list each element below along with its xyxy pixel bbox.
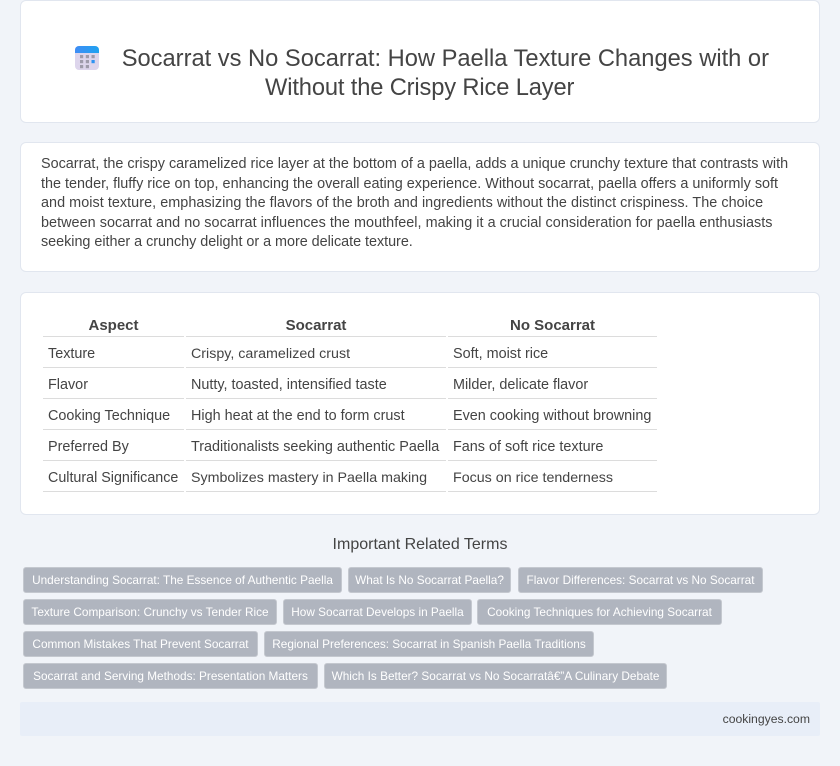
comparison table: Aspect <box>88 317 139 334</box>
comparison table: High heat at the end to form crust <box>191 408 405 424</box>
comparison table: Socarrat <box>286 317 346 334</box>
comparison table: Texture <box>48 346 95 362</box>
title <box>122 46 769 101</box>
panel: comparison table <box>20 292 820 515</box>
related term tags: Understanding Socarrat: The Essence of Authentic Paella <box>32 573 333 587</box>
comparison table: Preferred By <box>48 439 129 455</box>
related term tags: Flavor Differences: Socarrat vs No Socarrat <box>527 573 754 587</box>
comparison table: Focus on rice tenderness <box>453 470 613 486</box>
comparison table: Even cooking without browning <box>453 408 651 424</box>
title: Without the Crispy Rice Layer <box>265 75 574 101</box>
comparison table: Cultural Significance <box>48 470 178 486</box>
footer bar <box>20 702 820 736</box>
comparison table: Nutty, toasted, intensified taste <box>191 377 387 393</box>
comparison table: Crispy, caramelized crust <box>191 346 350 362</box>
comparison table: Flavor <box>48 377 88 393</box>
related term tags: Cooking Techniques for Achieving Socarrat <box>487 605 712 619</box>
icon: calendar <box>75 46 99 70</box>
related term tags: Regional Preferences: Socarrat in Spanish Paella Traditions <box>272 637 586 651</box>
intro paragraph: and moist texture, emphasizing the flavors of the broth and ingredients without the distinct crispiness. The choice <box>41 195 763 211</box>
footer source: cookingyes.com <box>723 712 810 726</box>
comparison table: Traditionalists seeking authentic Paella <box>191 439 439 455</box>
related term tags: Common Mistakes That Prevent Socarrat <box>32 637 249 651</box>
intro paragraph: the tender, fluffy rice on top, enhancing the overall eating experience. Without socarrat, paella offers a uniformly soft <box>41 176 778 192</box>
title: Socarrat vs No Socarrat: How Paella Texture Changes with or <box>122 46 769 72</box>
related term tags: How Socarrat Develops in Paella <box>291 605 464 619</box>
heading: related terms: Important Related Terms <box>333 536 507 553</box>
comparison table: Cooking Technique <box>48 408 170 424</box>
related term tags <box>23 567 763 689</box>
comparison table: Milder, delicate flavor <box>453 377 588 393</box>
related term tags: Which Is Better? Socarrat vs No Socarratâ€”A Culinary Debate <box>332 669 659 683</box>
intro paragraph <box>41 156 788 250</box>
intro paragraph: seeking either a crunchy delight or a more delicate texture. <box>41 234 413 250</box>
intro paragraph: Socarrat, the crispy caramelized rice layer at the bottom of a paella, adds a unique crunchy texture that contrasts with <box>41 156 788 172</box>
comparison table <box>43 317 657 492</box>
related term tags: Texture Comparison: Crunchy vs Tender Rice <box>31 605 269 619</box>
comparison table: Fans of soft rice texture <box>453 439 603 455</box>
related term tags: Socarrat and Serving Methods: Presentation Matters <box>33 669 308 683</box>
comparison table: Symbolizes mastery in Paella making <box>191 470 427 486</box>
comparison table: No Socarrat <box>510 317 595 334</box>
related term tags: What Is No Socarrat Paella? <box>355 573 504 587</box>
header panel <box>20 0 820 123</box>
comparison table: Soft, moist rice <box>453 346 548 362</box>
panel: intro text <box>20 142 820 272</box>
intro paragraph: between socarrat and no socarrat influences the mouthfeel, making it a crucial consideration for paella enthusiasts <box>41 215 773 231</box>
